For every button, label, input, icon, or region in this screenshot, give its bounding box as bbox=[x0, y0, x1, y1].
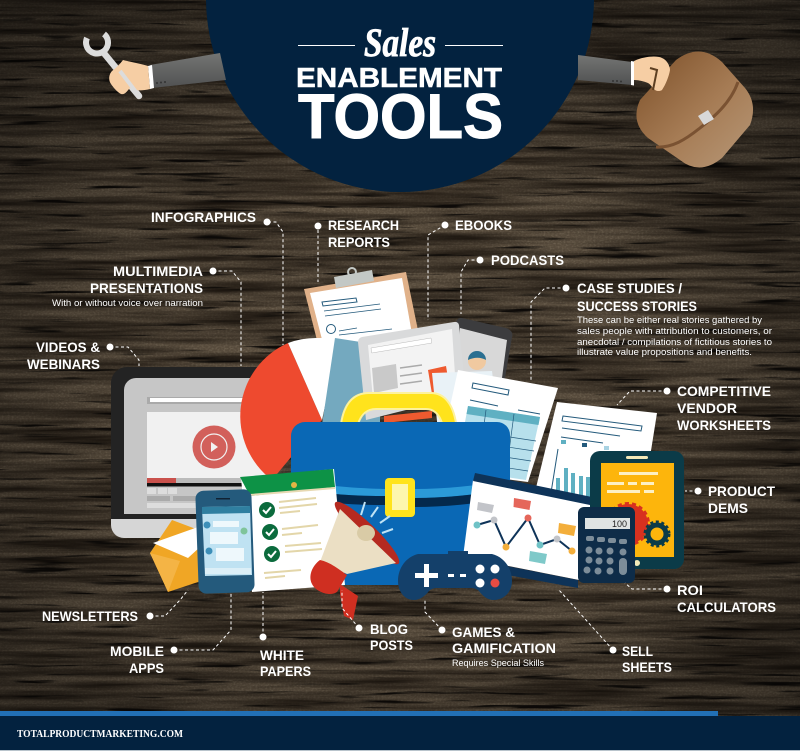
connector lines bbox=[110, 222, 698, 650]
label: videos and webinars: WEBINARS bbox=[27, 356, 100, 372]
label: research reports: REPORTS bbox=[328, 234, 390, 250]
illustration: worksheets with table bbox=[432, 370, 558, 482]
label: multimedia presentations bbox=[52, 263, 216, 308]
illustration: clipboard research report bbox=[304, 268, 421, 360]
illustration: mobile phone bbox=[195, 489, 255, 594]
label: case studies bbox=[562, 280, 772, 357]
icon: left arm with wrench bbox=[86, 34, 226, 96]
label: research reports: RESEARCH bbox=[328, 217, 399, 233]
label: case studies: SUCCESS STORIES bbox=[577, 298, 697, 314]
label: white papers: PAPERS bbox=[260, 663, 311, 679]
label: games and gamification bbox=[438, 624, 556, 668]
label: competitive vendor worksheets: COMPETITIVE bbox=[677, 383, 771, 399]
label: case studies: illustrate value propositions and benefits. bbox=[577, 347, 752, 357]
label: multimedia presentations: MULTIMEDIA bbox=[113, 263, 203, 279]
illustration: podcast phone bbox=[452, 318, 512, 378]
illustration: calculator bbox=[578, 507, 635, 583]
label: infographics: INFOGRAPHICS bbox=[151, 209, 256, 225]
illustration: tablet report bbox=[358, 322, 466, 420]
label: newsletters: NEWSLETTERS bbox=[42, 608, 138, 624]
illustration: blue briefcase bbox=[291, 422, 510, 585]
label: multimedia presentations: PRESENTATIONS bbox=[90, 280, 203, 296]
title badge circle bbox=[206, 0, 594, 192]
illustration: product demo tablet bbox=[590, 451, 684, 569]
illustration: line chart board bbox=[458, 473, 592, 588]
footer bar: TOTALPRODUCTMARKETING.COM bbox=[17, 729, 183, 740]
label: videos and webinars: VIDEOS & bbox=[36, 339, 100, 355]
label: games and gamification: Requires Special Skills bbox=[452, 658, 544, 668]
label: videos and webinars bbox=[27, 339, 114, 372]
title: Sales bbox=[364, 20, 436, 65]
label: mobile apps bbox=[110, 643, 178, 676]
label: case studies: sales people with attribution to customers, or bbox=[577, 326, 772, 336]
label: multimedia presentations: With or without voice over narration bbox=[52, 298, 203, 308]
illustration: game controller bbox=[398, 551, 512, 600]
label: white papers: WHITE bbox=[260, 647, 304, 663]
label: product dems: PRODUCT bbox=[708, 483, 775, 499]
label: ebooks: EBOOKS bbox=[455, 217, 512, 233]
illustration: pie chart bbox=[240, 338, 380, 480]
label: research reports bbox=[314, 217, 399, 250]
label: blog posts bbox=[356, 621, 413, 653]
label: blog posts: BLOG bbox=[370, 621, 408, 637]
illustration: megaphone bbox=[310, 496, 405, 620]
label: sell sheets: SELL bbox=[622, 643, 653, 659]
label: blog posts: POSTS bbox=[370, 637, 413, 653]
label: podcasts: PODCASTS bbox=[491, 252, 564, 268]
label: case studies: CASE STUDIES / bbox=[577, 280, 682, 296]
illustration: envelope bbox=[150, 520, 204, 592]
label: product dems bbox=[694, 483, 775, 516]
illustration: yellow bag handle bbox=[341, 393, 456, 424]
title bbox=[296, 20, 503, 152]
label: product dems: DEMS bbox=[708, 500, 748, 516]
label: competitive vendor worksheets bbox=[664, 383, 771, 433]
label: white papers bbox=[260, 634, 311, 679]
illustration: laptop bbox=[111, 367, 272, 538]
label: sell sheets: SHEETS bbox=[622, 659, 672, 675]
label: roi calculators bbox=[664, 582, 776, 615]
label: games and gamification: GAMES & bbox=[452, 624, 515, 640]
label: mobile apps: MOBILE bbox=[110, 643, 164, 659]
label: roi calculators: ROI bbox=[677, 582, 703, 598]
title: TOOLS bbox=[298, 82, 503, 152]
illustration: calculator: 100 bbox=[612, 519, 627, 529]
illustration: worksheet with bar chart bbox=[533, 402, 657, 520]
label: games and gamification: GAMIFICATION bbox=[452, 640, 556, 656]
title: ENABLEMENT bbox=[296, 62, 502, 93]
label: case studies: anecdotal / compilations of fictitious stories to bbox=[577, 337, 772, 347]
label: competitive vendor worksheets: VENDOR bbox=[677, 400, 737, 416]
label: case studies: These can be either real stories gathered by bbox=[577, 315, 762, 325]
label: roi calculators: CALCULATORS bbox=[677, 599, 776, 615]
label: sell sheets bbox=[610, 643, 672, 675]
illustration: white paper checklist bbox=[240, 469, 345, 592]
label: competitive vendor worksheets: WORKSHEETS bbox=[677, 417, 771, 433]
illustration: orange document in handle bbox=[384, 411, 432, 423]
label: mobile apps: APPS bbox=[129, 660, 164, 676]
icon: right arm with brown briefcase bbox=[578, 51, 753, 168]
footer bar bbox=[0, 711, 800, 751]
